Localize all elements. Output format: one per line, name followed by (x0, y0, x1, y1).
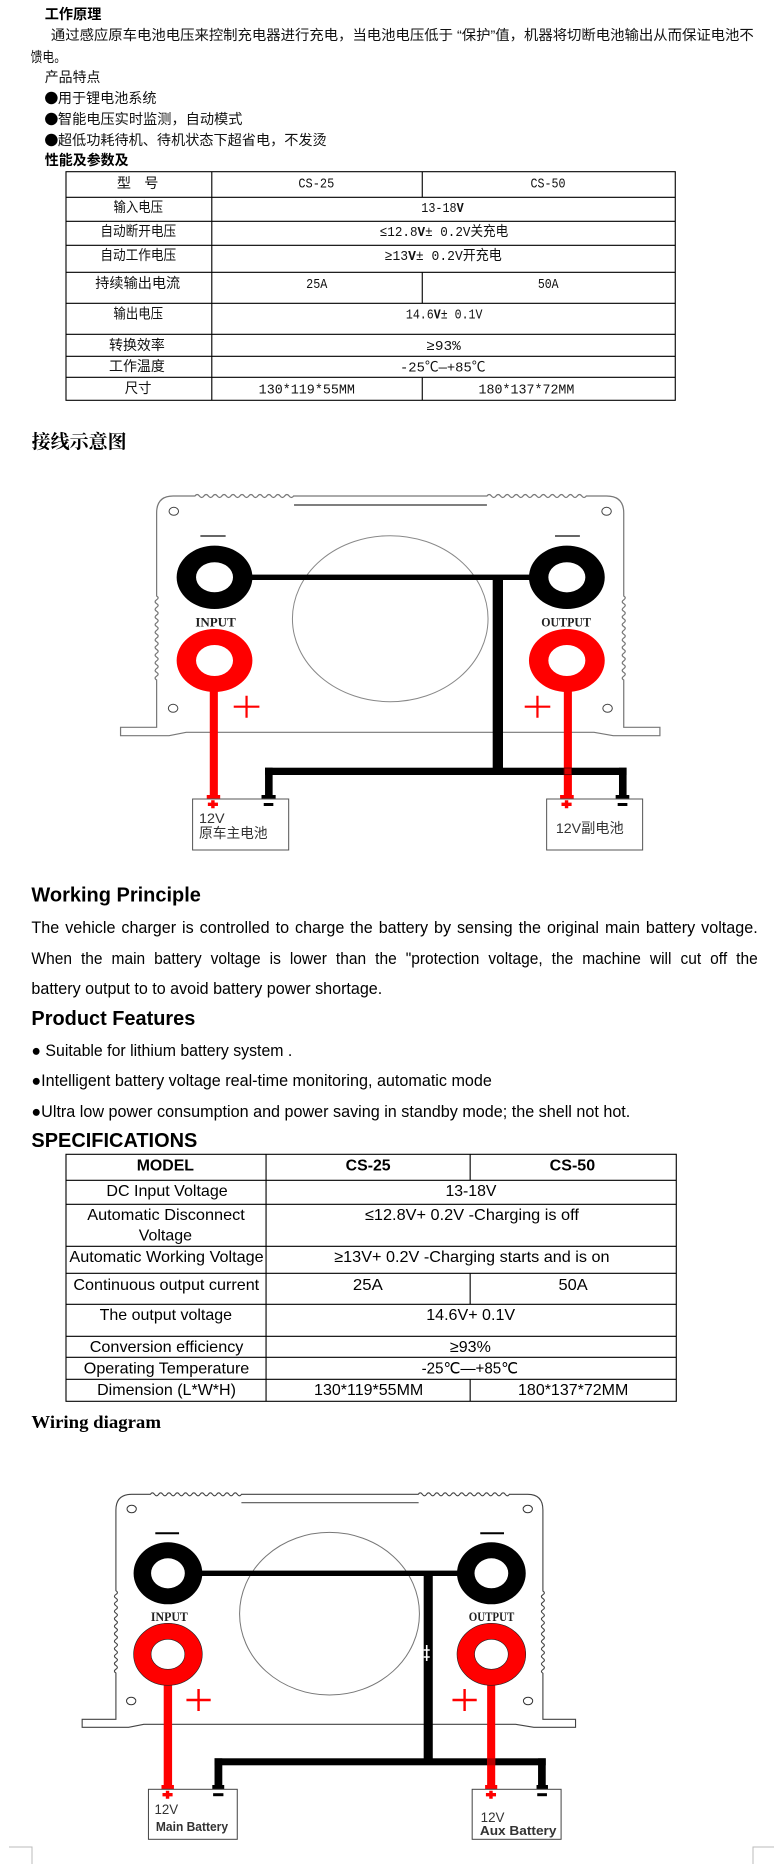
battery: main: 12V (199, 810, 225, 826)
wire crossing (564, 768, 572, 775)
table: Chinese specifications: 13-18V (421, 201, 464, 217)
table: English specifications (66, 1154, 676, 1401)
table: Chinese specifications (66, 172, 675, 400)
label: INPUT: INPUT (195, 615, 236, 629)
text block: working principle (Chinese): 通过感应原车电池电压来控制充电器进行充电，当电池电压低于 “保护”值，机器将切断电池输出从而保证电池不 (51, 27, 754, 43)
table: English specifications: DC Input Voltage (106, 1182, 228, 1200)
table: English specifications: -25℃—+85℃ (422, 1359, 518, 1377)
text block: working principle: The vehicle charger is controlled to charge the battery by sensing the original main battery voltage. (31, 918, 758, 937)
list: product features (31, 1041, 630, 1121)
table: Chinese specifications: 型 号 (117, 175, 158, 191)
plus signs (186, 1689, 477, 1711)
table: English specifications: Automatic Disconnect (87, 1206, 245, 1224)
table: English specifications: MODEL (137, 1157, 194, 1175)
battery: auxiliary (472, 1789, 561, 1839)
table: Chinese specifications: 转换效率 (109, 337, 165, 353)
table: English specifications: Conversion efficiency (90, 1338, 243, 1356)
table: Chinese specifications: ≥93% (426, 339, 461, 355)
table: Chinese specifications: 持续输出电流 (95, 275, 180, 291)
table: English specifications: 14.6V+ 0.1V (426, 1306, 515, 1324)
label: INPUT: INPUT (151, 1609, 188, 1624)
table: Chinese specifications: 工作温度 (109, 358, 165, 374)
black negative terminals (177, 546, 605, 609)
negative marks (155, 1532, 504, 1534)
black negative terminals (134, 1542, 526, 1604)
table: Chinese specifications: CS-25 (298, 177, 334, 192)
text block: working principle (31, 918, 758, 998)
table: English specifications: 25A (353, 1276, 383, 1294)
table: Chinese specifications: 自动工作电压 (100, 247, 176, 263)
device enclosure outline (121, 494, 660, 736)
list: product features (Chinese) (45, 90, 327, 148)
battery: main: 12V (155, 1801, 179, 1817)
table: Chinese specifications: 130*119*55MM (259, 383, 355, 398)
centre circle (240, 1532, 419, 1695)
battery: main: Main Battery (156, 1819, 229, 1834)
table: Chinese specifications: CS-50 (530, 177, 566, 192)
centre circle (292, 536, 488, 702)
heading: Wiring diagram: Wiring diagram (31, 1412, 161, 1432)
wire watermark notch (424, 1645, 430, 1661)
battery: auxiliary: Aux Battery (480, 1823, 557, 1838)
table: English specifications: Automatic Working Voltage (69, 1248, 264, 1266)
red positive terminals (177, 629, 605, 692)
table: Chinese specifications: 自动断开电压 (100, 223, 176, 239)
battery: main (148, 1789, 237, 1839)
table: English specifications: CS-50 (550, 1157, 595, 1175)
table: English specifications: Continuous output current (73, 1276, 260, 1294)
list: product features: ● Suitable for lithium battery system . (31, 1041, 292, 1060)
table: Chinese specifications: ≥13V± 0.2V开充电 (385, 248, 502, 265)
device enclosure outline (82, 1493, 576, 1727)
black wires (196, 1571, 548, 1789)
battery: auxiliary: 12V副电池 (556, 820, 624, 836)
table: Chinese specifications: 25A (306, 277, 328, 293)
heading: working principle (Chinese): 工作原理 (45, 6, 101, 22)
list: product features (Chinese): 超低功耗待机、待机状态下超省电，不发烫 (58, 132, 327, 148)
table: English specifications: The output voltage (100, 1306, 232, 1324)
battery: main (193, 799, 289, 850)
table: English specifications: CS-25 (346, 1157, 391, 1175)
text block: working principle (Chinese) (31, 27, 754, 65)
label: OUTPUT: OUTPUT (469, 1609, 515, 1624)
table: English specifications: Dimension (L*W*H) (97, 1381, 236, 1399)
label: OUTPUT: OUTPUT (541, 615, 591, 629)
list: product features (Chinese): 用于锂电池系统 (58, 90, 156, 106)
table: Chinese specifications: 180*137*72MM (479, 383, 574, 398)
wiring diagram: Chinese version (121, 494, 660, 850)
mounting holes (168, 507, 612, 712)
black wires (242, 575, 629, 799)
table: Chinese specifications: ≤12.8V± 0.2V关充电 (380, 224, 508, 241)
table: English specifications: ≥13V+ 0.2V -Charging starts and is on (334, 1248, 610, 1266)
table: English specifications: 13-18V (446, 1182, 497, 1200)
heading: Working Principle: Working Principle (31, 885, 201, 907)
table: Chinese specifications: 14.6V± 0.1V (406, 308, 483, 323)
table: English specifications: ≥93% (450, 1338, 491, 1356)
list: product features: ●Intelligent battery voltage real-time monitoring, automatic mode (31, 1071, 492, 1090)
text block: working principle (Chinese): 馈电。 (31, 49, 66, 65)
table: Chinese specifications: 50A (538, 277, 559, 293)
battery: auxiliary (547, 799, 643, 850)
mounting holes (127, 1505, 533, 1705)
table: English specifications: Operating Temperature (84, 1359, 249, 1377)
red wires (207, 688, 574, 799)
plus signs (234, 696, 550, 718)
table: Chinese specifications: 尺寸 (125, 380, 151, 396)
wiring diagram: English version (82, 1493, 576, 1839)
table: English specifications: Voltage (139, 1227, 192, 1245)
table: English specifications: 180*137*72MM (518, 1381, 628, 1399)
red wires (161, 1680, 497, 1789)
table: English specifications: 130*119*55MM (314, 1381, 423, 1399)
table: Chinese specifications: 输入电压 (113, 199, 163, 215)
heading: Product Features: Product Features (31, 1008, 195, 1030)
battery: auxiliary: 12V (481, 1809, 505, 1825)
table: English specifications: 50A (559, 1276, 588, 1294)
negative marks (200, 535, 580, 537)
table: Chinese specifications: -25℃—+85℃ (400, 361, 486, 376)
heading: SPECIFICATIONS: SPECIFICATIONS (31, 1130, 197, 1152)
battery: main: 原车主电池 (199, 825, 268, 841)
heading: performance and parameters: 性能及参数及 (45, 152, 129, 168)
list: product features: ●Ultra low power consumption and power saving in standby mode; the shell not hot. (31, 1102, 630, 1121)
text block: working principle: battery output to to avoid battery power shortage. (31, 979, 382, 998)
heading: wiring diagram (Chinese): 接线示意图 (32, 430, 127, 453)
table: English specifications: ≤12.8V+ 0.2V -Charging is off (365, 1206, 579, 1224)
table: Chinese specifications: 输出电压 (113, 306, 163, 321)
heading: product features (Chinese): 产品特点 (45, 69, 100, 85)
list: product features (Chinese): 智能电压实时监测，自动模式 (58, 111, 242, 127)
wire crossing (487, 1758, 495, 1765)
red positive terminals (134, 1623, 526, 1685)
